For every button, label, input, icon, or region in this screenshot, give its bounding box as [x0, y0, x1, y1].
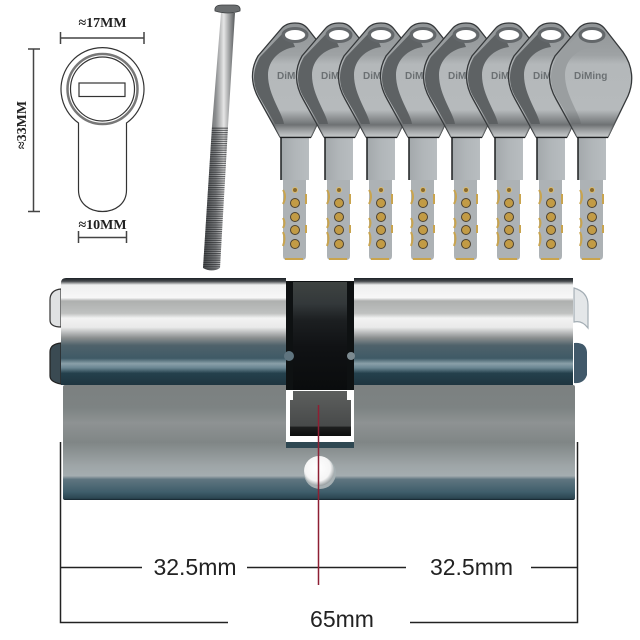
left upper barrel — [61, 278, 286, 385]
right end screw caps — [574, 288, 588, 383]
key 4 — [380, 23, 463, 260]
dimension: height 33mm: ≈33MM — [15, 101, 30, 149]
dimension: bottom width 10mm: ≈10MM — [78, 218, 127, 233]
black cam — [284, 281, 355, 391]
key 2 — [296, 23, 379, 260]
key 8 — [549, 23, 632, 260]
dimension: height 33mm — [15, 49, 40, 212]
label: left half: 32.5mm — [153, 554, 237, 580]
key 6: DiMing — [491, 71, 524, 82]
profile outline — [61, 48, 144, 212]
key 6 — [466, 23, 549, 260]
label: total: 65mm — [310, 606, 374, 632]
icon: long screw — [203, 5, 240, 270]
key 4: DiMing — [405, 71, 438, 82]
euro lock cylinder — [50, 278, 588, 500]
key 3 — [338, 23, 421, 260]
dimension lines — [60, 405, 578, 632]
key 3: DiMing — [363, 71, 396, 82]
cam window — [286, 390, 354, 448]
lower body — [63, 385, 575, 500]
key 8: DiMing — [574, 71, 607, 82]
key 5: DiMing — [448, 71, 481, 82]
icon: set of eight keys — [252, 23, 632, 260]
key 7: DiMing — [533, 71, 566, 82]
key 2: DiMing — [321, 71, 354, 82]
icon: cylinder end profile with dimensions — [15, 16, 144, 243]
key 5 — [423, 23, 506, 260]
left end screw caps — [50, 289, 61, 384]
dimension: top width 17mm: ≈17MM — [78, 16, 127, 31]
key 1: DiMing — [277, 71, 310, 82]
mounting screw hole — [304, 456, 336, 489]
dimension: bottom width 10mm — [78, 218, 127, 243]
center line — [318, 405, 320, 585]
key 7 — [508, 23, 591, 260]
right upper barrel — [354, 278, 573, 385]
label: right half: 32.5mm — [430, 554, 513, 580]
key 1 — [252, 23, 335, 260]
dimension: top width 17mm — [60, 16, 144, 44]
